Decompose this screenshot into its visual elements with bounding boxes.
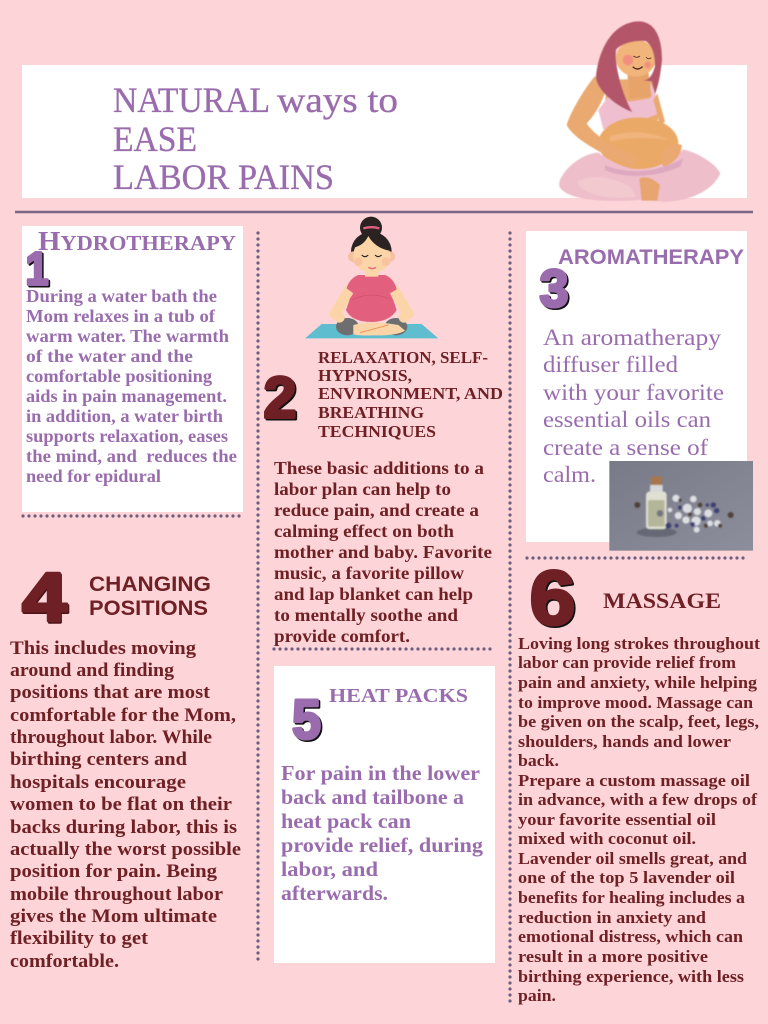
heading: hydrotherapy: HYDROTHERAPY: [38, 226, 236, 256]
text: changing positions body: comfortable.: [10, 951, 119, 972]
icon: meditating pregnant woman: [305, 217, 438, 338]
text: massage body: Loving long strokes throughout: [518, 634, 761, 653]
text: relaxation body: reduce pain, and create a: [274, 500, 479, 520]
number 2: 2: [265, 367, 298, 432]
text: massage body: in advance, with a few drops of: [518, 790, 758, 809]
text: changing positions body: positions that are most: [10, 682, 211, 703]
number 4: 4: [23, 560, 68, 637]
heading: changing positions: [89, 573, 211, 620]
text: relaxation body: and lap blanket can help: [274, 584, 473, 604]
text: heat packs body: [281, 761, 483, 905]
text: heat packs body: heat pack can: [281, 809, 411, 833]
text: massage body: pain.: [518, 986, 556, 1005]
text: aromatherapy body: create a sense of: [543, 435, 708, 461]
top rule: [15, 211, 753, 213]
text: massage body: [518, 634, 761, 1005]
panel: heat packs: [274, 666, 495, 963]
text: changing positions body: mobile throughout labor: [10, 884, 224, 905]
text: massage body: benefits for healing includes a: [518, 888, 745, 907]
text: changing positions body: actually the worst possible: [10, 839, 241, 860]
text: heat packs body: labor, and: [281, 857, 378, 881]
text: massage body: one of the top 5 lavender oil: [518, 868, 735, 887]
number 3: 3: [541, 261, 570, 320]
heading: relaxation: HYPNOSIS,: [318, 366, 412, 385]
text: hydrotherapy body: [26, 286, 237, 486]
text: changing positions body: This includes moving: [10, 638, 197, 659]
title: ways to: [277, 80, 398, 120]
text: relaxation body: labor plan can help to: [274, 479, 451, 499]
text: massage body: mixed with coconut oil.: [518, 829, 696, 848]
text: changing positions body: women to be flat on their: [10, 794, 233, 815]
number 1: 1: [26, 242, 48, 294]
text: hydrotherapy body: in addition, a water birth: [26, 406, 223, 426]
text: hydrotherapy body: the mind, and reduces the: [26, 446, 237, 466]
text: relaxation body: music, a favorite pillow: [274, 563, 464, 583]
panel: relaxation: [264, 217, 503, 646]
text: hydrotherapy body: comfortable positioning: [26, 366, 212, 386]
text: massage body: birthing experience, with less: [518, 967, 745, 986]
panel: changing positions: [10, 558, 241, 972]
panel: aromatherapy: [526, 231, 753, 551]
text: aromatherapy body: with your favorite: [543, 380, 724, 406]
text: massage body: back.: [518, 751, 559, 770]
heading: changing positions: POSITIONS: [89, 597, 208, 620]
title: NATURAL: [113, 80, 270, 120]
text: relaxation body: mother and baby. Favorite: [274, 542, 492, 562]
text: relaxation body: These basic additions to a: [274, 458, 484, 478]
text: relaxation body: calming effect on both: [274, 521, 454, 541]
number 4: 4: [22, 558, 67, 636]
text: heat packs body: back and tailbone a: [281, 785, 464, 809]
text: changing positions body: birthing centers and: [10, 749, 187, 770]
heading: massage: MASSAGE: [603, 588, 721, 613]
text: massage body: be given on the scalp, feet, legs,: [518, 712, 759, 731]
title: [113, 80, 398, 197]
number 5: 5: [294, 689, 322, 752]
text: changing positions body: [10, 638, 241, 972]
text: hydrotherapy body: supports relaxation, eases: [26, 426, 228, 446]
text: aromatherapy body: essential oils can: [543, 407, 711, 433]
number 6: 6: [530, 556, 576, 642]
text: changing positions body: comfortable for the Mom,: [10, 705, 236, 726]
icon: pregnant woman sitting: [559, 21, 720, 202]
text: aromatherapy body: diffuser filled: [543, 352, 678, 378]
text: changing positions body: gives the Mom ultimate: [10, 906, 217, 927]
heading: aromatherapy: AROMATHERAPY: [558, 246, 744, 269]
title: EASE: [113, 119, 197, 159]
text: changing positions body: backs during labor, this is: [10, 817, 237, 838]
text: hydrotherapy body: warm water. The warmth: [26, 326, 229, 346]
title banner: [22, 65, 747, 198]
heading: relaxation: RELAXATION, SELF-: [318, 348, 488, 367]
text: massage body: to improve mood. Massage can: [518, 693, 753, 712]
text: heat packs body: For pain in the lower: [281, 761, 480, 785]
title: LABOR PAINS: [113, 157, 334, 197]
text: massage body: your favorite essential oil: [518, 810, 716, 829]
text: heat packs body: afterwards.: [281, 881, 388, 905]
text: changing positions body: position for pain. Being: [10, 861, 218, 882]
panel: massage: [518, 556, 761, 1005]
text: relaxation body: to mentally soothe and: [274, 605, 458, 625]
text: aromatherapy body: An aromatherapy: [543, 325, 721, 351]
heading: relaxation: ENVIRONMENT, AND: [318, 384, 503, 403]
text: changing positions body: around and finding: [10, 660, 175, 681]
text: changing positions body: flexibility to get: [10, 928, 149, 949]
text: massage body: Lavender oil smells great, and: [518, 849, 747, 868]
text: hydrotherapy body: of the water and the: [26, 346, 193, 366]
heading: changing positions: CHANGING: [89, 573, 211, 596]
text: massage body: result in a more positive: [518, 947, 708, 966]
text: hydrotherapy body: Mom relaxes in a tub of: [26, 306, 215, 326]
text: hydrotherapy body: need for epidural: [26, 466, 161, 486]
text: relaxation body: [274, 458, 492, 646]
text: massage body: pain and anxiety, while helping: [518, 673, 758, 692]
heading: relaxation: BREATHING: [318, 403, 424, 422]
text: hydrotherapy body: During a water bath the: [26, 286, 217, 306]
number 3: 3: [540, 260, 568, 318]
number 5: 5: [292, 688, 321, 750]
text: massage body: shoulders, hands and lower: [518, 732, 731, 751]
text: massage body: emotional distress, which can: [518, 927, 743, 946]
text: massage body: labor can provide relief from: [518, 653, 736, 672]
heading: relaxation: TECHNIQUES: [318, 422, 436, 441]
text: aromatherapy body: calm.: [543, 462, 596, 488]
text: aromatherapy body: [543, 325, 724, 488]
number 1: 1: [27, 244, 50, 296]
text: changing positions body: hospitals encourage: [10, 772, 186, 793]
text: changing positions body: throughout labor. While: [10, 727, 212, 748]
text: hydrotherapy body: aids in pain management.: [26, 386, 227, 406]
text: heat packs body: provide relief, during: [281, 833, 483, 857]
number 6: 6: [531, 557, 577, 643]
text: massage body: Prepare a custom massage oil: [518, 771, 750, 790]
panel: hydrotherapy: [22, 226, 243, 512]
text: relaxation body: provide comfort.: [274, 626, 410, 646]
text: massage body: reduction in anxiety and: [518, 908, 706, 927]
heading: relaxation: [318, 348, 503, 441]
number 2: 2: [264, 366, 296, 430]
photo: essential oil bottle with lavender: [609, 461, 753, 551]
heading: heat packs: HEAT PACKS: [329, 685, 468, 707]
